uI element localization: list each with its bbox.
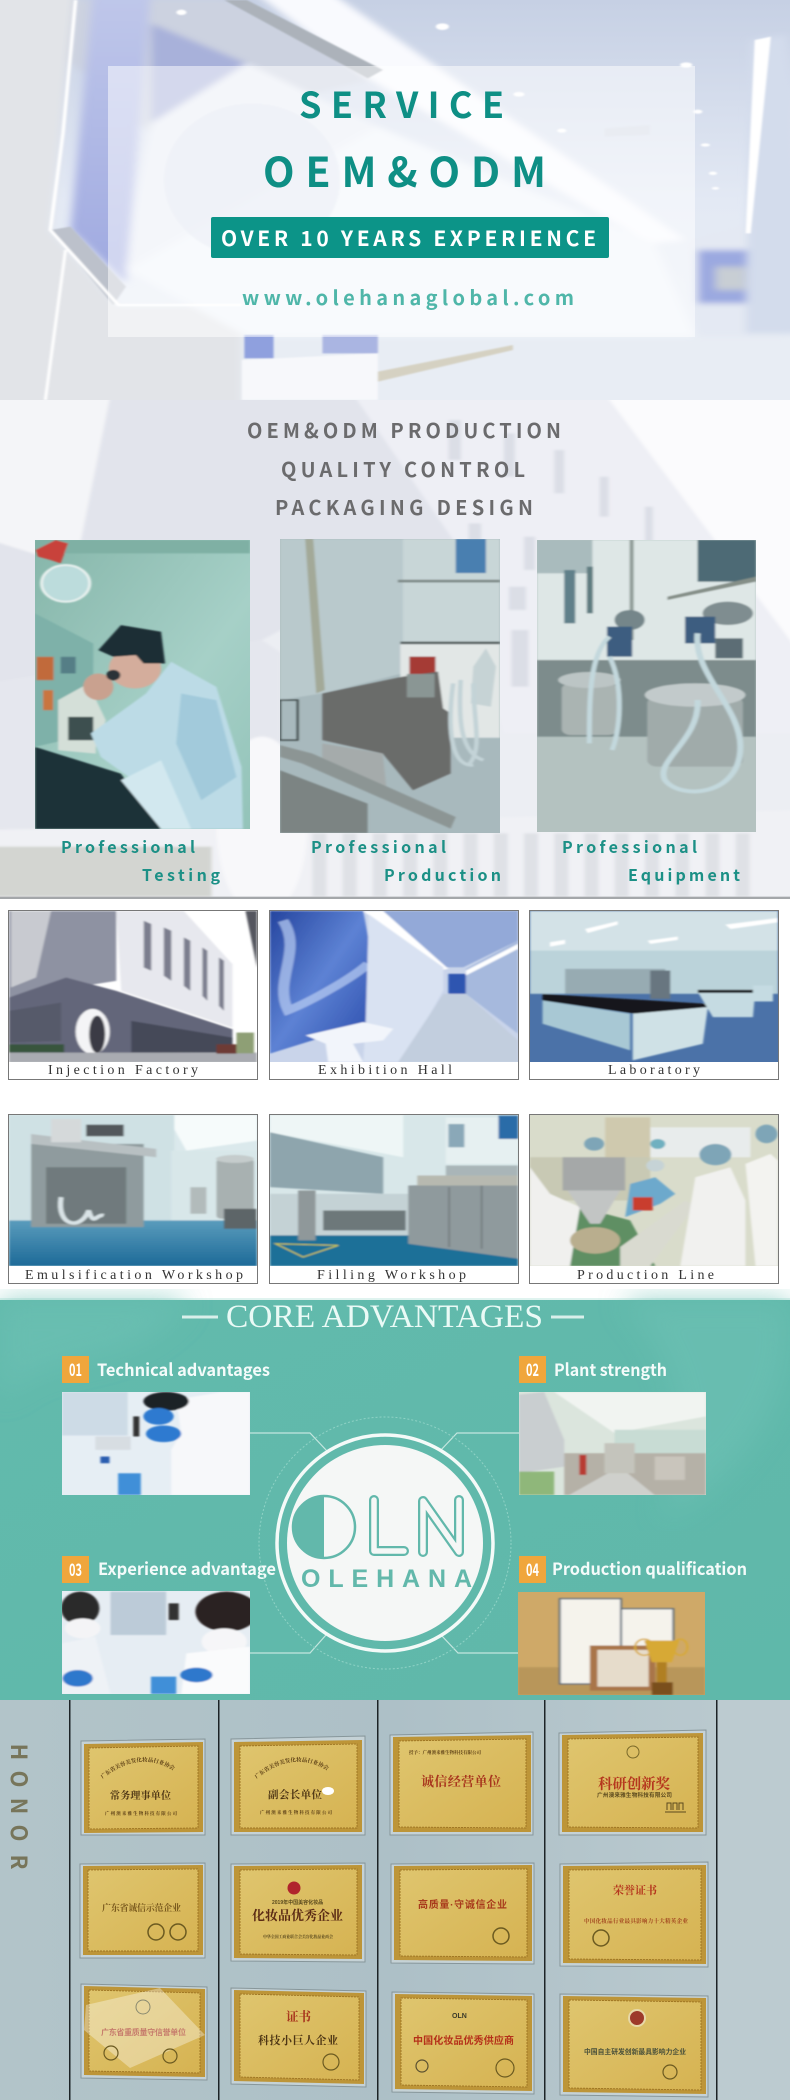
item 02: plant strength heading: Plant strength <box>554 1356 667 1381</box>
photo: certificates and trophy <box>518 1592 705 1695</box>
labels under photos: Professional <box>61 834 195 858</box>
plaque: excellent supplier <box>392 1992 534 2094</box>
plaque: integrity model enterprise <box>80 1863 205 1958</box>
plaque: executive director unit: 广州澳来雅生物科技有限公司 <box>105 1810 178 1817</box>
plaque: independent R&D influence enterprise <box>560 1994 708 2097</box>
heading: SERVICE: SERVICE <box>299 77 504 129</box>
hero background: bright corridor photo <box>0 0 790 400</box>
plaque: quality and trust unit with glare <box>81 1984 207 2080</box>
plaque: honest business unit: 诚信经营单位 <box>421 1774 501 1789</box>
card: Emulsification Workshop <box>8 1114 258 1284</box>
labels under photos: Testing <box>142 862 220 886</box>
item 03: experience advantage heading: 03 <box>69 1556 82 1581</box>
plaque: research innovation award: 科研创新奖 <box>598 1775 670 1793</box>
plaque: executive director unit: 常务理事单位 <box>110 1789 171 1802</box>
text block: service list: PACKAGING DESIGN <box>275 492 533 521</box>
labels under photos: Equipment <box>628 862 740 886</box>
connector lines to logo <box>250 1433 519 1653</box>
text block: service list <box>247 415 561 521</box>
card: Injection Factory <box>8 910 258 1080</box>
item 01: technical advantages heading: 01 <box>69 1356 82 1381</box>
heading: OEM&ODM: OEM&ODM <box>263 139 546 199</box>
labels under photos <box>61 834 740 886</box>
plaque: honor certificate: 中国化妆品行业最具影响力十大精英企业 <box>584 1917 688 1925</box>
labels under photos: Production <box>384 862 501 886</box>
plaque: excellent supplier: 中国化妆品优秀供应商 <box>413 2034 514 2047</box>
section background: pale factory building <box>0 400 790 899</box>
text block: service list: OEM&ODM PRODUCTION <box>247 415 561 444</box>
card: Production Line: Production Line <box>577 1268 714 1283</box>
plaque: quality and trust unit with glare: 广东省重质量守信誉单位 <box>101 2027 186 2037</box>
plaque: vice president unit <box>230 1736 366 1836</box>
item 01: technical advantages heading: Technical advantages <box>97 1356 270 1381</box>
card: Filling Workshop: Filling Workshop <box>317 1268 466 1283</box>
plaque: excellent cosmetics enterprise <box>231 1863 365 1962</box>
plaque: research innovation award: 广州澳来雅生物科技有限公司 <box>597 1791 672 1799</box>
plaque: high quality enterprise <box>391 1863 534 1964</box>
vertical HONOR lettering: N <box>4 1798 36 1814</box>
logo emblem: OLN Olehana <box>259 1417 511 1669</box>
item 04: production qualification heading: Production qualification <box>552 1555 747 1580</box>
plaque: excellent cosmetics enterprise: 中华全国工商业联合会美容化妆品业商会 <box>263 1933 333 1939</box>
item 02: plant strength heading: 02 <box>526 1356 539 1381</box>
photo: stainless steel equipment <box>537 540 756 832</box>
badge: over 10 years experience <box>211 217 609 258</box>
plaque: research innovation award <box>559 1730 706 1835</box>
plaque: integrity model enterprise: 广东省诚信示范企业 <box>102 1902 181 1913</box>
labels under photos: Professional <box>311 834 446 858</box>
plaque: vice president unit: 广州澳来雅生物科技有限公司 <box>260 1809 332 1816</box>
plaque: vice president unit: 副会长单位 <box>268 1788 322 1801</box>
vertical HONOR lettering: O <box>4 1771 36 1787</box>
panel: factory photo grid <box>0 899 790 1298</box>
plaque: high quality enterprise: 高质量·守诚信企业 <box>418 1898 507 1911</box>
plaque: small tech giant certificate: 证书 <box>286 2009 311 2024</box>
plaque: small tech giant certificate: 科技小巨人企业 <box>258 2033 338 2047</box>
panel: core advantages <box>0 1298 790 1700</box>
photo: plant machinery <box>519 1392 706 1495</box>
plaque: excellent cosmetics enterprise: 2019年中国美容化妆品 <box>272 1899 323 1906</box>
plaque: honor certificate <box>560 1862 708 1967</box>
card: Filling Workshop <box>270 1114 518 1284</box>
card: Laboratory <box>530 910 778 1080</box>
panel: hero service banner <box>0 0 790 413</box>
card: Exhibition Hall: Exhibition Hall <box>318 1063 452 1078</box>
panel: production services <box>0 393 790 917</box>
vertical HONOR lettering <box>4 1744 36 1870</box>
plaque: honest business unit: 授予：广州澳来雅生物科技有限公司 <box>409 1749 481 1756</box>
vertical HONOR lettering: R <box>4 1854 36 1870</box>
card: Exhibition Hall <box>270 910 518 1080</box>
card: Laboratory: Laboratory <box>608 1063 700 1078</box>
logo emblem: OLN Olehana: OLEHANA <box>301 1565 472 1593</box>
plaque: excellent cosmetics enterprise: 化妆品优秀企业 <box>252 1908 343 1923</box>
heading: core advantages: CORE ADVANTAGES <box>226 1299 543 1335</box>
photo: technician at microscope <box>35 540 250 829</box>
plaque: vice president unit: 广东省美容美发化妆品行业协会 <box>254 1756 329 1779</box>
plaque: executive director unit <box>80 1738 206 1836</box>
card: Production Line <box>530 1114 778 1284</box>
item 04: production qualification heading: 04 <box>526 1556 539 1581</box>
badge: over 10 years experience: OVER 10 YEARS EXPERIENCE <box>221 223 596 253</box>
text block: service list: QUALITY CONTROL <box>281 454 525 483</box>
item 03: experience advantage heading: Experience advantage <box>98 1555 276 1580</box>
card: Injection Factory: Injection Factory <box>48 1063 198 1078</box>
plaque: small tech giant certificate <box>231 1988 366 2087</box>
panel: honor wall of certificates <box>0 1700 790 2100</box>
plaque: independent R&D influence enterprise: 中国自主研发创新最具影响力企业 <box>584 2047 686 2056</box>
plaque: executive director unit: 广东省美容美发化妆品行业协会 <box>100 1756 175 1779</box>
photo: lab researcher with blue gloves <box>62 1392 250 1495</box>
photo: researchers in masks <box>62 1591 250 1694</box>
plaque: excellent supplier: OLN <box>452 2013 467 2020</box>
photo: production mixer <box>280 539 500 833</box>
translucent title panel <box>108 66 695 337</box>
plaque: honor certificate: 荣誉证书 <box>613 1883 658 1897</box>
item 02: plant strength heading <box>519 1356 667 1383</box>
website url: www.olehanaglobal.com <box>242 282 574 311</box>
vertical HONOR lettering: H <box>4 1744 36 1760</box>
plaque: honest business unit <box>390 1732 533 1835</box>
labels under photos: Professional <box>562 834 697 858</box>
vertical HONOR lettering: O <box>4 1825 36 1841</box>
card: Emulsification Workshop: Emulsification Workshop <box>25 1268 243 1283</box>
